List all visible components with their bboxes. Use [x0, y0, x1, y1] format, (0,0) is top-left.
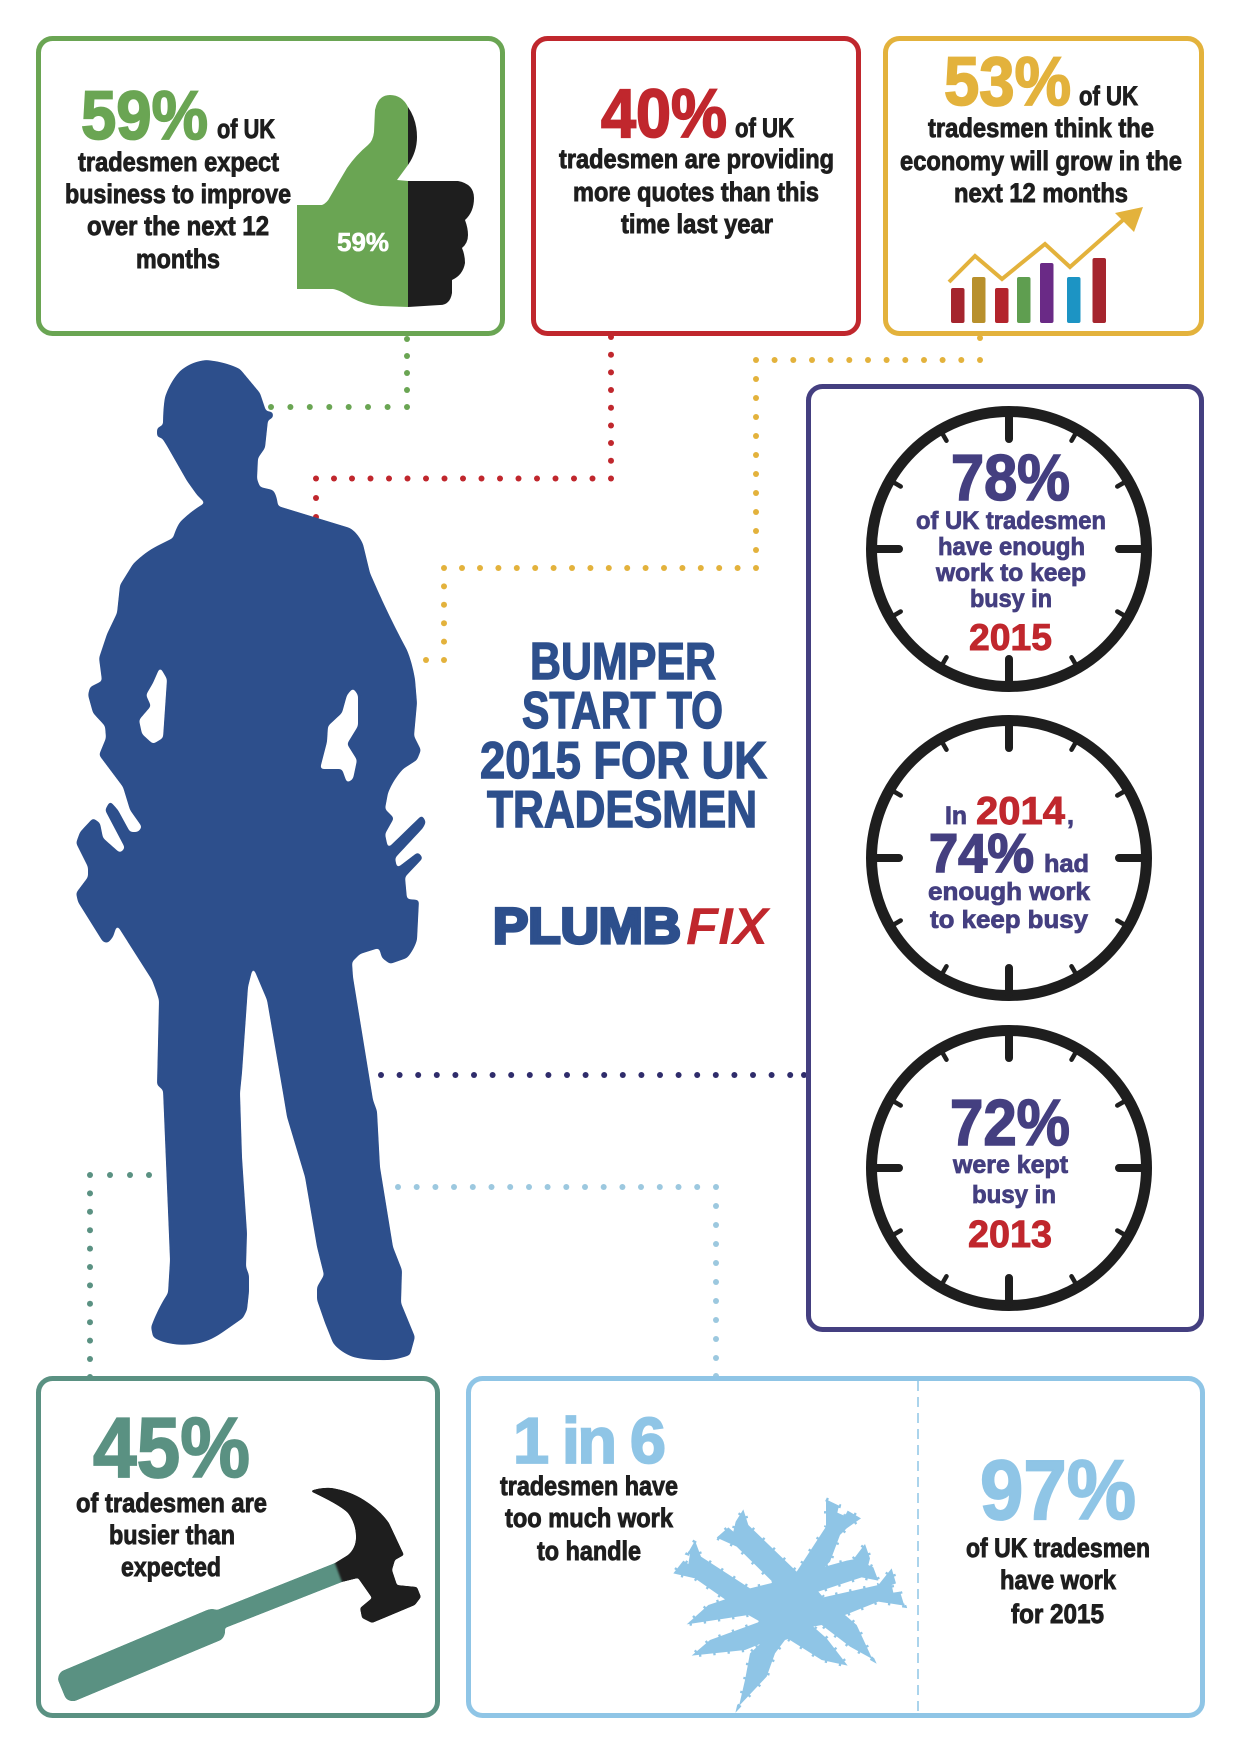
text: of UK: of UK	[735, 113, 794, 143]
chart: bars and rising arrow	[949, 207, 1143, 323]
text: 59% in thumb: 59%	[337, 227, 389, 257]
dotted connector: red	[313, 334, 614, 520]
panel: 45% busier than expected	[38, 1378, 438, 1716]
dotted connector: green	[268, 336, 410, 410]
text: tradesmen are providing more quotes: time last year	[621, 209, 773, 239]
clock: 72% in 2013	[872, 1030, 1146, 1306]
text: tradesmen think the economy will grow	[900, 113, 1182, 208]
dotted connector: navy	[378, 1072, 807, 1078]
text: tradesmen think the economy will grow: economy will grow in the	[900, 146, 1182, 176]
text: tradesmen expect business to improve: months	[136, 244, 220, 274]
dotted connector: teal	[87, 1172, 152, 1380]
divider	[917, 1381, 919, 1713]
text: tradesmen expect business to improve: business to improve	[65, 179, 291, 209]
icon: thumbs up	[297, 95, 474, 307]
text: of UK: of UK	[1079, 81, 1138, 111]
text: of UK tradesmen have work for 2015	[966, 1533, 1150, 1629]
text: tradesmen expect business to improve: over the next 12	[87, 211, 269, 241]
text: of tradesmen are busier than expected: busier than	[109, 1520, 235, 1550]
stat: 45%: 45%	[93, 1401, 250, 1496]
logo: Plumbfix: FIX	[686, 898, 771, 956]
icon: bundle of screws	[673, 1499, 904, 1706]
clock: 78% in 2015: 78%	[951, 441, 1070, 514]
tradesman silhouette	[76, 360, 426, 1360]
text: tradesmen expect business to improve: tradesmen expect	[78, 147, 279, 177]
panel: 59% expect business to improve	[38, 38, 502, 334]
panel: 53% think economy will grow	[886, 38, 1202, 334]
text: tradesmen think the economy will grow: tradesmen think the	[928, 113, 1154, 143]
clock: 74% in 2014: had	[1044, 850, 1089, 878]
stat: 59%: 59%	[81, 77, 208, 154]
clock: 72% in 2013: busy in	[972, 1181, 1056, 1209]
text: tradesmen have too much work to handle: to handle	[537, 1536, 641, 1566]
text: tradesmen have too much work to handle: too much work	[505, 1503, 674, 1533]
stat: 97%: 97%	[980, 1443, 1136, 1537]
clock: 74% in 2014: 2014	[976, 790, 1065, 833]
text: of UK: of UK	[217, 114, 275, 144]
clock: 74% in 2014: enough work	[928, 878, 1090, 906]
clock: 74% in 2014: In	[945, 802, 967, 830]
clock: 74% in 2014: 74%	[929, 822, 1034, 884]
title	[480, 633, 767, 839]
text: of UK tradesmen have work for 2015: for 2015	[1011, 1599, 1104, 1629]
icon: hammer	[58, 1488, 421, 1701]
panel: clocks	[808, 386, 1202, 1330]
panel: 40% providing more quotes	[534, 38, 858, 334]
logo: Plumbfix: PLUMB	[493, 898, 681, 954]
text: tradesmen expect business to improve	[65, 147, 291, 274]
text: of UK tradesmen have work for 2015: have work	[1000, 1565, 1117, 1595]
text: tradesmen have too much work to handle: tradesmen have	[500, 1471, 678, 1501]
text: of UK tradesmen have work for 2015: of UK tradesmen	[966, 1533, 1150, 1563]
clock: 72% in 2013: 72%	[950, 1086, 1070, 1159]
clock: 78% in 2015	[872, 412, 1146, 686]
text: tradesmen are providing more quotes	[559, 144, 834, 239]
logo: Plumbfix	[493, 898, 771, 956]
title: 2015 FOR UK	[480, 732, 767, 790]
stat: 1 in 6: 1 in 6	[513, 1404, 666, 1477]
dotted connector: yellow	[423, 335, 983, 663]
text: of tradesmen are busier than expected: of tradesmen are	[76, 1488, 267, 1518]
clock: 78% in 2015: busy in	[970, 585, 1052, 613]
stat: 40%: 40%	[601, 75, 727, 152]
title: TRADESMEN	[487, 781, 757, 839]
text: tradesmen are providing more quotes: more quotes than this	[573, 177, 819, 207]
clock: 74% in 2014: ,	[1067, 802, 1074, 830]
text: tradesmen think the economy will grow: next 12 months	[954, 178, 1128, 208]
stat: 53%: 53%	[944, 43, 1071, 120]
title: START TO	[522, 682, 723, 740]
clock: 72% in 2013: were kept	[952, 1151, 1069, 1179]
clock: 78% in 2015: 2015	[969, 617, 1052, 658]
panel: 1 in 6 and 97%	[468, 1378, 1202, 1716]
clock: 74% in 2014: to keep busy	[930, 906, 1088, 934]
clock: 72% in 2013: 2013	[968, 1214, 1052, 1256]
text: of tradesmen are busier than expected: expected	[121, 1552, 221, 1582]
dotted connector: light blue	[395, 1184, 719, 1379]
clock: 78% in 2015: work to keep	[935, 559, 1086, 587]
clock: 78% in 2015: of UK tradesmen	[916, 507, 1106, 535]
text: tradesmen have too much work to handle	[500, 1471, 678, 1566]
title: BUMPER	[530, 633, 716, 691]
text: of tradesmen are busier than expected	[76, 1488, 267, 1582]
text: tradesmen are providing more quotes: tradesmen are providing	[559, 144, 834, 174]
clock: 78% in 2015: have enough	[938, 533, 1085, 561]
clock: 74% in 2014	[872, 720, 1146, 996]
